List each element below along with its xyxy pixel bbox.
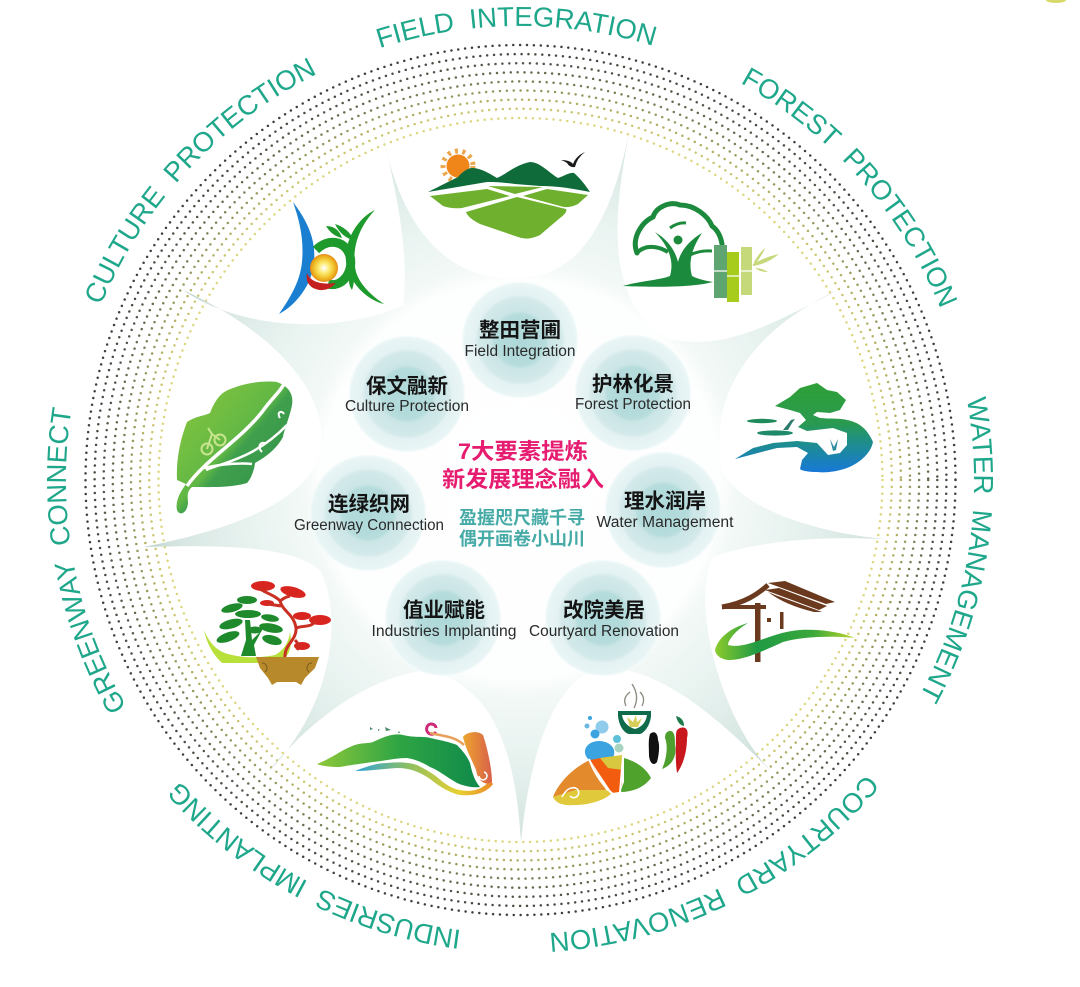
label: water management: WATER MANAGEMENT xyxy=(922,396,994,704)
node: water management: 理水润岸 xyxy=(624,489,706,513)
node: courtyard renovation: 改院美居 xyxy=(563,598,645,622)
centre subheading: teal: 盈握咫尺藏千寻 xyxy=(459,508,585,528)
icon: culture emblem xyxy=(279,202,384,314)
node: industries implanting: Industries Implanting xyxy=(372,623,516,640)
corner mark xyxy=(1046,0,1066,3)
node: field integration xyxy=(464,319,576,360)
node: courtyard renovation: Courtyard Renovation xyxy=(529,623,679,640)
node: culture protection: 保文融新 xyxy=(366,374,448,398)
node: greenway connection: Greenway Connection xyxy=(294,517,444,534)
node: industries implanting xyxy=(372,599,516,640)
icon: water landscape xyxy=(735,383,873,472)
centre heading: pink: 7大要素提炼 xyxy=(458,439,588,464)
inner discs xyxy=(310,282,721,676)
icon: tree and bamboo xyxy=(623,204,779,302)
nine-point star backdrop xyxy=(143,128,897,842)
node: water management xyxy=(596,489,734,531)
node: culture protection: Culture Protection xyxy=(345,398,469,415)
centre heading: pink: 新发展理念融入 xyxy=(442,467,604,492)
label: industries implanting: INDUSRIES IMPLANTING xyxy=(170,784,459,949)
node: greenway connection xyxy=(294,493,444,534)
label: greenway connect: GREENWAY CONNECT xyxy=(47,407,124,712)
node: water management: Water Management xyxy=(596,514,734,531)
icon: house with swoosh xyxy=(715,581,855,662)
icon: bonsai xyxy=(204,581,331,685)
centre heading: pink xyxy=(442,439,604,492)
node: forest protection: 护林化景 xyxy=(592,373,674,396)
node: greenway connection: 连绿织网 xyxy=(328,493,410,516)
node: courtyard renovation xyxy=(529,598,679,640)
centre subheading: teal: 偶开画卷小山川 xyxy=(459,529,585,549)
icon: landscape scroll xyxy=(317,724,493,795)
icon: field with sun and bird xyxy=(428,151,590,239)
icon: leaf with cyclist xyxy=(177,381,292,513)
node: industries implanting: 值业赋能 xyxy=(403,599,485,622)
centre subheading: teal xyxy=(459,508,585,549)
dotted concentric rings xyxy=(86,45,956,915)
label: field integration: FIELD INTEGRATION xyxy=(376,7,656,48)
node: culture protection xyxy=(345,374,469,415)
node: field integration: Field Integration xyxy=(464,343,576,360)
node: field integration: 整田营圃 xyxy=(479,319,561,342)
label: courtyard renovation: COURTYARD RENOVATION xyxy=(551,778,876,952)
icon: food and chili xyxy=(553,684,688,805)
node: forest protection: Forest Protection xyxy=(575,396,691,413)
label: forest protection: FOREST PROTECTION xyxy=(742,68,958,307)
label: culture protection: CULTURE PROTECTION xyxy=(86,58,316,302)
node: forest protection xyxy=(575,373,691,413)
